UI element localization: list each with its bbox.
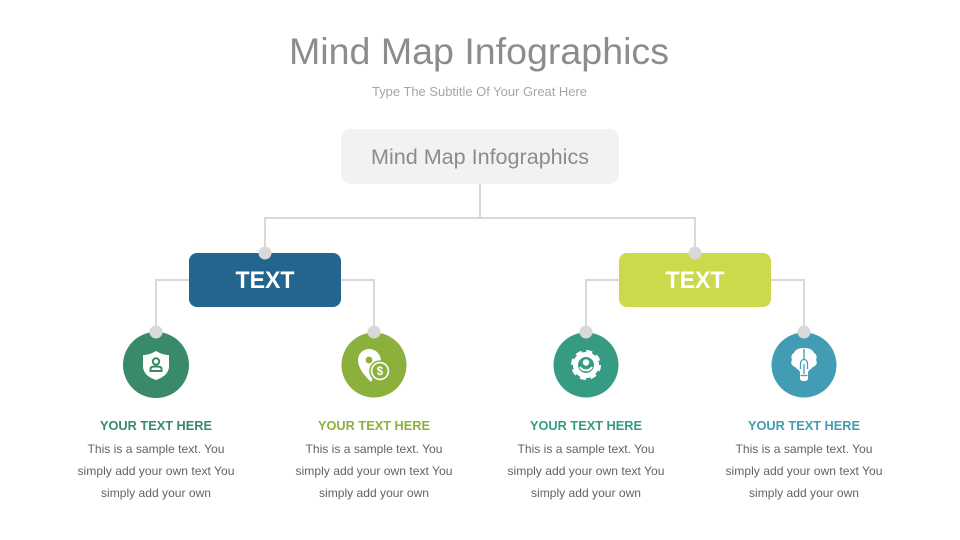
icon circle: location pin with dollar — [342, 332, 406, 398]
text block 3 — [508, 419, 664, 500]
text block 1: This is a sample text. You — [88, 442, 224, 456]
text block 4: YOUR TEXT HERE — [748, 419, 860, 433]
icon circle: lightbulb brain — [772, 332, 836, 398]
text block 2: simply add your own — [319, 486, 429, 500]
icon circle: shield person — [123, 332, 189, 398]
branch node: blue: TEXT — [236, 267, 295, 294]
text block 1: simply add your own — [101, 486, 211, 500]
branch node: lime: TEXT — [666, 267, 725, 294]
text block 4: This is a sample text. You — [736, 442, 872, 456]
text block 4: simply add your own text You — [726, 464, 882, 478]
text block 3: simply add your own — [531, 486, 641, 500]
branch node: lime — [619, 253, 771, 307]
text block 3: YOUR TEXT HERE — [530, 419, 642, 433]
text block 1: YOUR TEXT HERE — [100, 419, 212, 433]
text block 4: simply add your own — [749, 486, 859, 500]
root node: Mind Map Infographics — [371, 145, 589, 169]
text block 2 — [296, 419, 452, 500]
text block 3: simply add your own text You — [508, 464, 664, 478]
title: Mind Map Infographics — [289, 31, 669, 72]
text block 4 — [726, 419, 882, 500]
icon circle: gear person — [554, 332, 618, 398]
icon circle: location pin with dollar: $ — [377, 366, 384, 378]
text block 1: simply add your own text You — [78, 464, 235, 478]
branch node: blue — [189, 253, 341, 307]
text block 1 — [78, 419, 235, 500]
text block 2: This is a sample text. You — [306, 442, 442, 456]
root node — [341, 129, 619, 184]
text block 3: This is a sample text. You — [518, 442, 654, 456]
text block 2: simply add your own text You — [296, 464, 452, 478]
text block 2: YOUR TEXT HERE — [318, 419, 430, 433]
connector lines — [156, 184, 804, 332]
subtitle: Type The Subtitle Of Your Great Here — [372, 85, 587, 99]
connector dots — [150, 246, 810, 338]
